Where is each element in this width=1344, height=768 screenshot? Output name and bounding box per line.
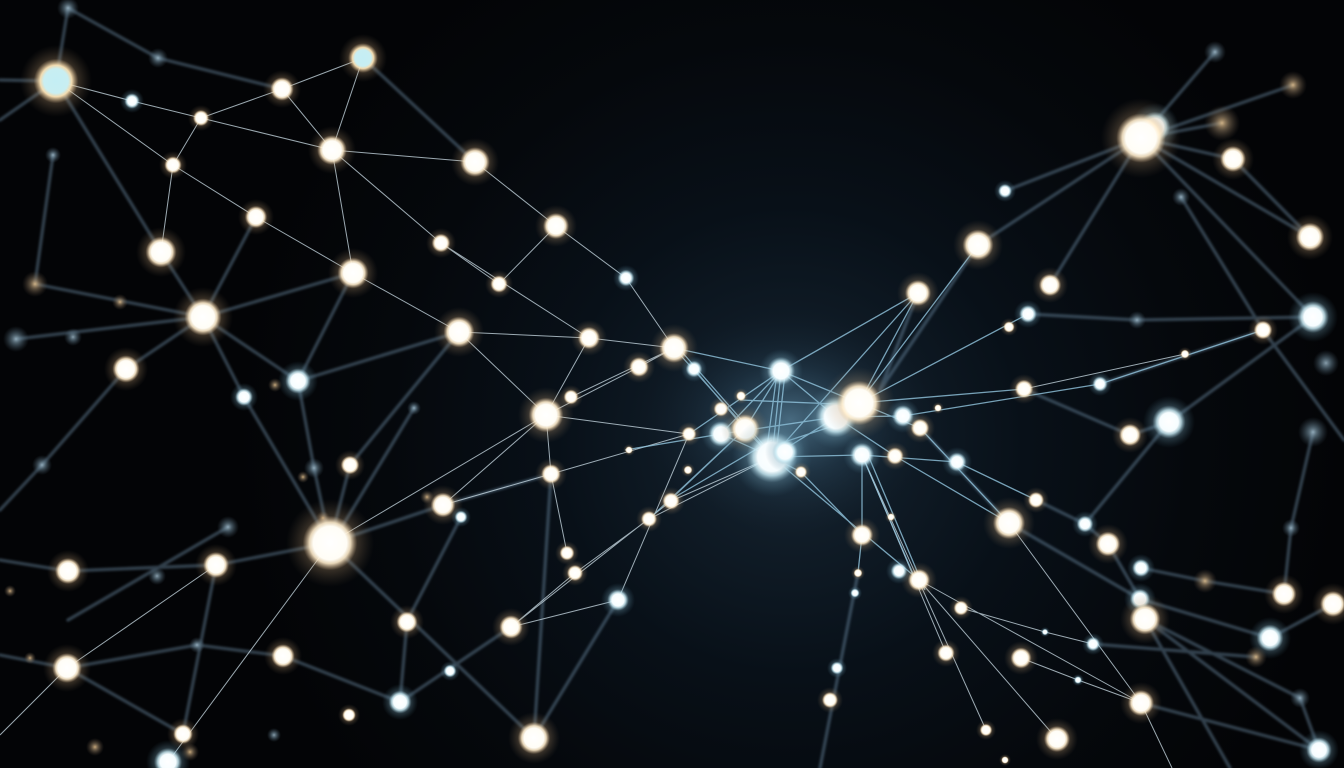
node cluster: central hub — [701, 349, 944, 497]
node cluster: upper right — [897, 41, 1339, 453]
node cluster: upper left — [3, 0, 639, 391]
hub connections — [625, 245, 1263, 590]
central glow — [640, 310, 940, 530]
node cluster: lower left — [4, 361, 560, 768]
node cluster: lower right — [817, 447, 1344, 768]
node cluster: centre left — [420, 307, 707, 617]
